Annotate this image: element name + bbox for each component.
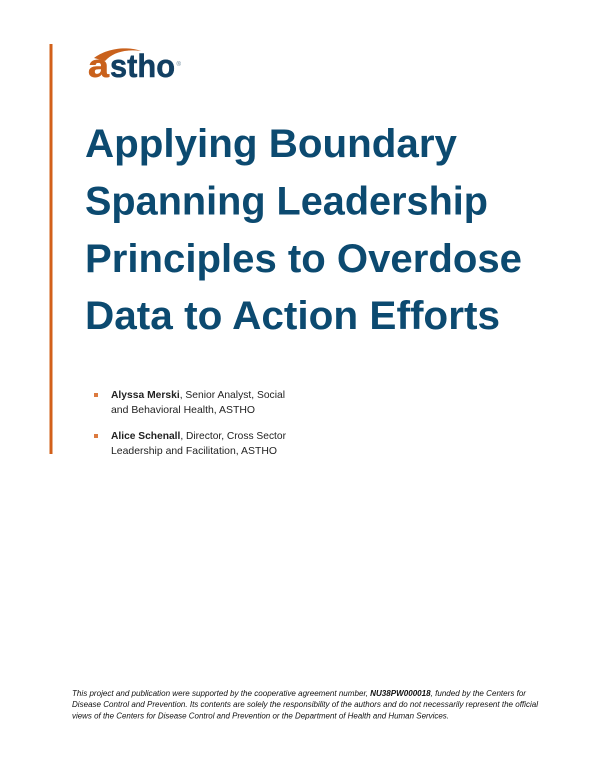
logo arc [94,48,141,61]
accent vertical bar [50,44,52,454]
funding disclaimer [72,688,539,720]
title: Principles to Overdose [85,237,522,281]
author list [94,389,286,457]
author 2: Leadership and Facilitation, ASTHO [111,445,277,457]
author 2 [94,430,286,457]
author 1: and Behavioral Health, ASTHO [111,404,255,416]
logo: astho [88,48,182,84]
logo registered mark: ® [176,61,182,68]
logo wordmark: a [88,48,109,84]
title: Data to Action Efforts [85,294,500,338]
funding disclaimer: views of the Centers for Disease Control and Prevention or the Department of Health and Human Services. [72,710,449,720]
author 1: Alyssa Merski, Senior Analyst, Social [111,389,285,401]
funding disclaimer: Disease Control and Prevention. Its contents are solely the responsibility of the authors and do not necessarily represent the official [72,699,539,709]
funding disclaimer: This project and publication were supported by the cooperative agreement number, NU38PW000018, funded by the Centers for [72,688,527,698]
title: Applying Boundary [85,122,457,166]
title: Spanning Leadership [85,180,488,224]
author 2: Alice Schenall, Director, Cross Sector [111,430,286,442]
title [85,122,522,338]
author 1 [94,389,285,416]
logo wordmark: stho [110,48,175,84]
